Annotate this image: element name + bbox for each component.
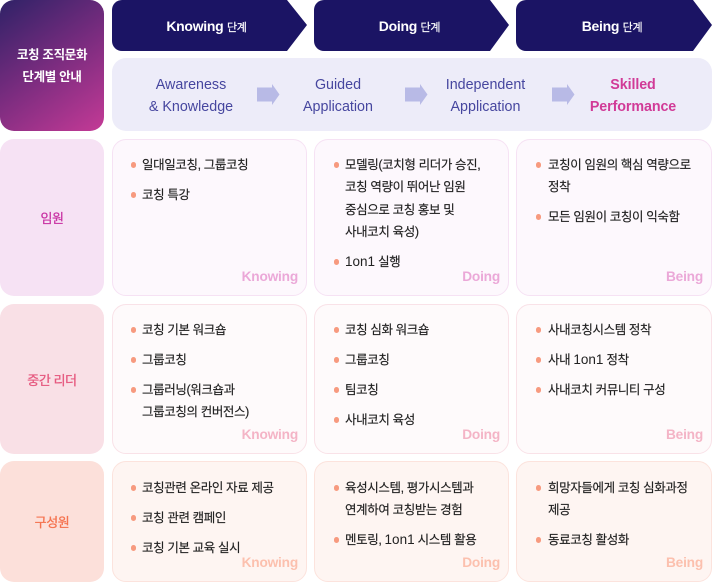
panel: title: 코칭 조직문화: [17, 48, 87, 62]
panel: title: [0, 0, 104, 131]
list item: 멘토링, 1on1 시스템 활용: [345, 532, 476, 547]
row label: 중간 리더: [0, 304, 104, 454]
heading arrow: Knowing: Knowing 단계: [166, 18, 247, 34]
list item: [536, 481, 688, 517]
stage: Independent Application: Independent: [446, 77, 525, 93]
list item: 연계하여 코칭받는 경험: [345, 503, 462, 517]
list item: 희망자들에게 코칭 심화과정: [548, 481, 688, 495]
card: 구성원 Being: [516, 461, 712, 582]
row label: 임원: [0, 139, 104, 296]
stage tag: Being: [666, 269, 703, 284]
list item: 사내 1on1 정착: [548, 352, 629, 367]
stage tag: Knowing: [242, 427, 298, 442]
stage: Awareness & Knowledge: & Knowledge: [149, 99, 233, 115]
card: 중간 리더 Being: [516, 304, 712, 454]
card: 구성원 Doing: [314, 461, 509, 582]
row label: 구성원: [0, 461, 104, 582]
list item: 육성시스템, 평가시스템과: [345, 481, 474, 495]
list item: 그룹코칭: [345, 353, 389, 367]
stage tag: Knowing: [242, 555, 298, 570]
stage tag: Doing: [462, 269, 500, 284]
list item: [334, 158, 480, 239]
list item: 모든 임원이 코칭이 익숙함: [548, 210, 680, 224]
card: 임원 Knowing: [112, 139, 307, 296]
stage: Skilled Performance: [590, 77, 676, 115]
heading arrow: Knowing: [112, 0, 307, 51]
list item: 사내코치 육성: [345, 413, 415, 427]
list item: [536, 158, 691, 194]
stage: Guided Application: [303, 77, 373, 115]
list item: 1on1 실행: [345, 254, 400, 269]
stage: Awareness & Knowledge: Awareness: [156, 77, 226, 93]
list item: [131, 383, 249, 419]
heading arrow: Doing: [314, 0, 509, 51]
list item: 팀코칭: [345, 383, 378, 397]
heading arrow: Doing: Doing 단계: [379, 18, 440, 34]
list item: 코칭이 임원의 핵심 역량으로: [548, 158, 691, 172]
list item: 사내코치 육성): [345, 225, 419, 239]
list item: 그룹코칭: [142, 353, 186, 367]
stage tag: Being: [666, 427, 703, 442]
stage: Independent Application: [446, 77, 526, 115]
list item: 일대일코칭, 그룹코칭: [142, 158, 248, 172]
card: 임원 Being: [516, 139, 712, 296]
stage: Guided Application: Application: [303, 99, 373, 115]
stage: Guided Application: Guided: [315, 77, 361, 93]
arrow 1: [257, 84, 280, 105]
row label: 임원: 임원: [40, 211, 64, 226]
stage: Skilled Performance: Performance: [590, 99, 676, 115]
list item: 코칭 특강: [142, 188, 190, 202]
list item: 정착: [548, 180, 570, 194]
stage: Independent Application: Application: [451, 99, 520, 115]
list item: 중심으로 코칭 홍보 및: [345, 203, 454, 217]
stage tag: Knowing: [242, 269, 298, 284]
card: 임원 Doing: [314, 139, 509, 296]
arrow 3: [552, 84, 574, 105]
card: 구성원 Knowing: [112, 461, 307, 582]
panel: title: 단계별 안내: [22, 70, 82, 84]
list item: 제공: [548, 503, 570, 517]
list item: 그룹러닝(워크숍과: [142, 383, 235, 397]
list item: 코칭 기본 교육 실시: [142, 541, 240, 555]
stage tag: Being: [666, 555, 703, 570]
list item: 코칭 심화 워크숍: [345, 323, 429, 337]
arrow 2: [405, 84, 428, 105]
list item: 코칭관련 온라인 자료 제공: [142, 481, 274, 495]
heading arrow: Being: [516, 0, 712, 51]
card: 중간 리더 Knowing: [112, 304, 307, 454]
list item: 동료코칭 활성화: [548, 533, 629, 547]
card: 중간 리더 Doing: [314, 304, 509, 454]
list item: 코칭 역량이 뛰어난 임원: [345, 180, 465, 194]
list item: 사내코치 커뮤니티 구성: [548, 383, 665, 397]
row label: 구성원: 구성원: [35, 515, 69, 530]
list item: 코칭 기본 워크숍: [142, 323, 226, 337]
stage tag: Doing: [462, 427, 500, 442]
row label: 중간 리더: 중간 리더: [27, 372, 77, 388]
list item: [334, 481, 474, 517]
stage: Skilled Performance: Skilled: [610, 77, 656, 93]
panel: stages: [112, 58, 712, 131]
list item: 모델링(코치형 리더가 승진,: [345, 158, 480, 172]
stage tag: Doing: [462, 555, 500, 570]
stage: Awareness & Knowledge: [149, 77, 233, 115]
heading arrow: Being: Being 단계: [582, 18, 642, 34]
list item: 사내코칭시스템 정착: [548, 323, 651, 337]
list item: 그룹코칭의 컨버전스): [142, 405, 249, 419]
list item: 코칭 관련 캠페인: [142, 511, 226, 525]
